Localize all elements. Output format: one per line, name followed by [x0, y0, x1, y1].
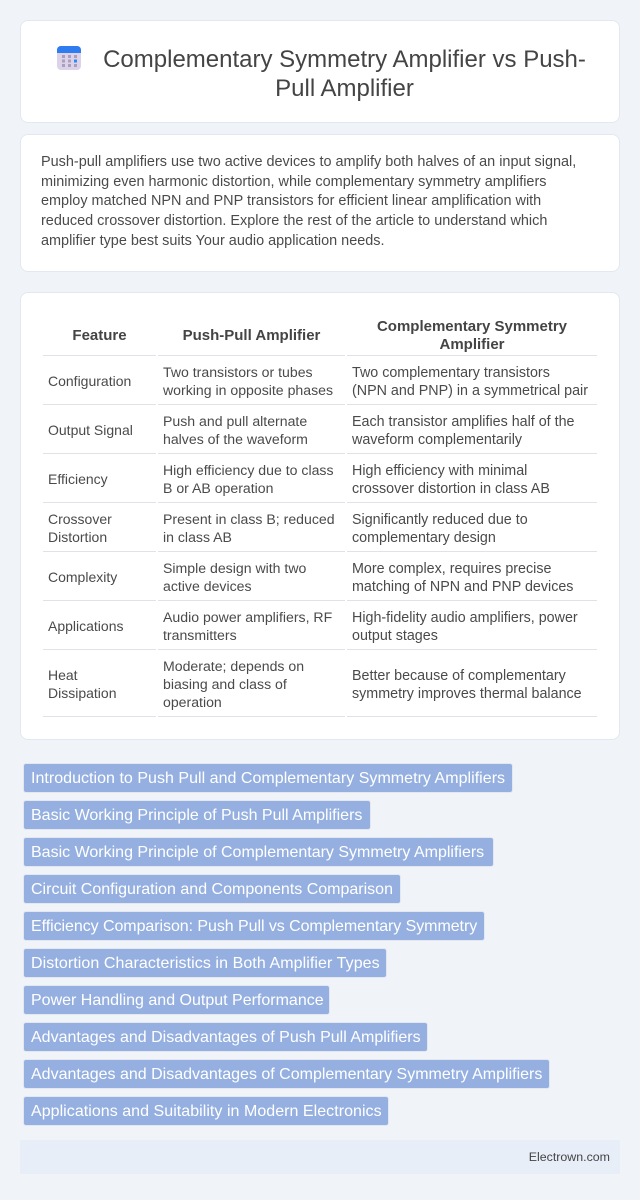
intro paragraph: amplifier type best suits Your audio application needs.: [41, 233, 385, 249]
row: output signal: Push and pull alternate: [163, 413, 307, 429]
row: efficiency: High efficiency with minimal: [352, 463, 527, 479]
row: applications: transmitters: [163, 627, 237, 643]
row: configuration: Two complementary transistors: [352, 365, 550, 381]
tag: [23, 1022, 428, 1052]
tag: Basic Working Principle of Complementary Symmetry Amplifiers: [31, 844, 484, 861]
tag: Introduction to Push Pull and Complementary Symmetry Amplifiers: [31, 770, 505, 787]
row: crossover distortion: in class AB: [163, 529, 232, 545]
row: heat dissipation: Heat: [48, 667, 78, 683]
table header: Complementary Symmetry: [377, 318, 567, 335]
table header: Amplifier: [439, 336, 504, 353]
footer credit: Electrown.com: [529, 1150, 610, 1164]
row: configuration: working in opposite phases: [163, 382, 333, 398]
row: configuration: Two transistors or tubes: [163, 364, 313, 380]
tag: Circuit Configuration and Components Comparison: [31, 881, 393, 898]
row: heat dissipation: Moderate; depends on: [163, 658, 304, 674]
row: crossover distortion: Distortion: [48, 529, 107, 545]
table header: [72, 318, 567, 353]
row: configuration: Configuration: [48, 373, 131, 389]
table header: Push-Pull Amplifier: [183, 327, 320, 344]
tag: [23, 874, 401, 904]
row: heat dissipation: operation: [163, 694, 222, 710]
row: crossover distortion: Crossover: [48, 511, 112, 527]
row: output signal: waveform complementarily: [352, 432, 522, 448]
row: efficiency: Efficiency: [48, 471, 108, 487]
row: complexity: Complexity: [48, 569, 117, 585]
row: efficiency: High efficiency due to class: [163, 462, 334, 478]
intro paragraph: reduced crossover distortion. Explore the rest of the article to understand which: [41, 213, 547, 229]
tag: [23, 985, 330, 1015]
table header: Feature: [72, 327, 127, 344]
row: complexity: active devices: [163, 578, 252, 594]
row: output signal: halves of the waveform: [163, 431, 308, 447]
row: applications: Audio power amplifiers, RF: [163, 609, 332, 625]
tag: Applications and Suitability in Modern Electronics: [31, 1103, 382, 1120]
tag: [23, 800, 371, 830]
row: applications: High-fidelity audio amplifiers, power: [352, 610, 578, 626]
row: heat dissipation: [48, 658, 582, 710]
tag: [23, 948, 387, 978]
row: heat dissipation: symmetry improves thermal balance: [352, 686, 582, 702]
row: configuration: [48, 364, 588, 399]
intro paragraph: minimizing even harmonic distortion, while complementary symmetry amplifiers: [41, 174, 546, 190]
icon: calendar: [57, 46, 81, 70]
row: output signal: Each transistor amplifies half of the: [352, 414, 575, 430]
tag: [23, 1096, 389, 1126]
row: configuration: (NPN and PNP) in a symmetrical pair: [352, 383, 588, 399]
topic tag list: [23, 763, 550, 1126]
row: crossover distortion: [48, 511, 528, 546]
tag: Power Handling and Output Performance: [31, 992, 324, 1009]
tag: Distortion Characteristics in Both Amplifier Types: [31, 955, 380, 972]
row: complexity: Simple design with two: [163, 560, 306, 576]
tag: [23, 1059, 550, 1089]
tag: [23, 911, 485, 941]
row: crossover distortion: Significantly reduced due to: [352, 512, 528, 528]
header card: [20, 20, 620, 123]
row: applications: [48, 609, 578, 644]
title: Pull Amplifier: [275, 75, 414, 102]
title: Complementary Symmetry Amplifier vs Push-: [103, 46, 586, 73]
row: output signal: Output Signal: [48, 422, 133, 438]
row: complexity: matching of NPN and PNP devices: [352, 579, 573, 595]
row: heat dissipation: biasing and class of: [163, 676, 287, 692]
intro paragraph: employ matched NPN and PNP transistors for efficient linear amplification with: [41, 193, 541, 209]
tag: Efficiency Comparison: Push Pull vs Complementary Symmetry: [31, 918, 477, 935]
row: complexity: [48, 560, 573, 595]
row: efficiency: B or AB operation: [163, 480, 273, 496]
tag: [23, 837, 494, 867]
row: heat dissipation: Better because of complementary: [352, 668, 566, 684]
tag: Basic Working Principle of Push Pull Amplifiers: [31, 807, 362, 824]
intro text panel: [20, 134, 620, 272]
footer bar: [20, 1140, 620, 1174]
row: complexity: More complex, requires precise: [352, 561, 551, 577]
row: output signal: [48, 413, 575, 448]
title: [103, 46, 586, 102]
row: applications: output stages: [352, 628, 438, 644]
row: efficiency: crossover distortion in class AB: [352, 481, 550, 497]
row: crossover distortion: complementary design: [352, 530, 496, 546]
tag: Advantages and Disadvantages of Push Pull Amplifiers: [31, 1029, 421, 1046]
row: applications: Applications: [48, 618, 124, 634]
panel: comparison table: [20, 292, 620, 740]
intro paragraph: [41, 154, 576, 249]
row: heat dissipation: Dissipation: [48, 685, 116, 701]
intro paragraph: Push-pull amplifiers use two active devices to amplify both halves of an input signal,: [41, 154, 576, 170]
row: crossover distortion: Present in class B; reduced: [163, 511, 335, 527]
tag: Advantages and Disadvantages of Complementary Symmetry Amplifiers: [31, 1066, 542, 1083]
tag: [23, 763, 513, 793]
row: efficiency: [48, 462, 550, 497]
